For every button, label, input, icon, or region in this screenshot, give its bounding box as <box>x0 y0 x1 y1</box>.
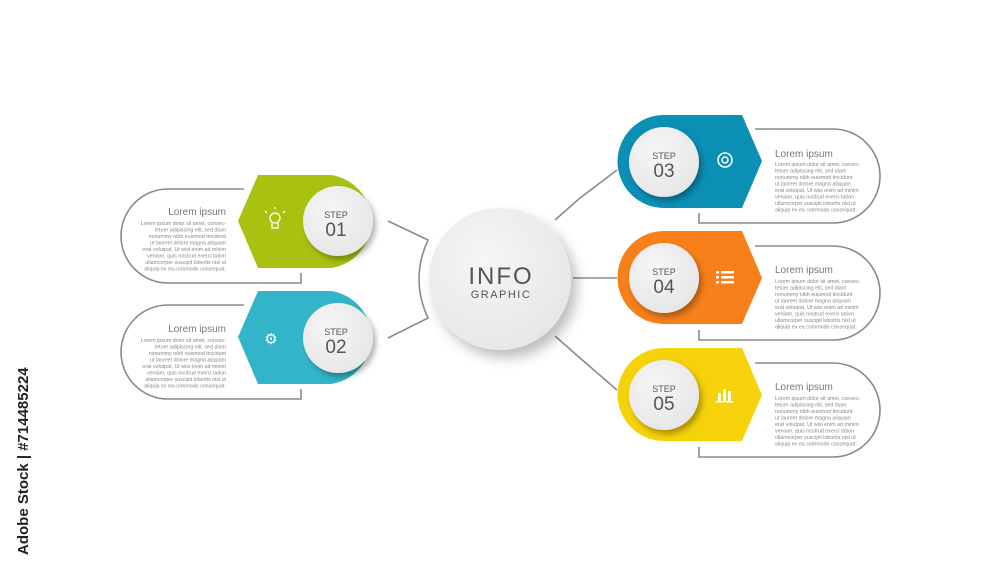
step 02: 02 <box>325 337 347 358</box>
step 04: STEP <box>652 267 676 277</box>
step 03: ut laoreet dolore magna aliquam <box>775 182 852 188</box>
step 04: 04 <box>653 277 675 298</box>
step 01: tetuer adipiscing elit, sed diam <box>155 228 227 234</box>
step 01: STEP <box>324 210 348 220</box>
step 03: ullamcorper suscipit lobortis nisl ut <box>775 201 856 207</box>
step 01: nonummy nibh euismod tincidunt <box>149 234 227 240</box>
step 03: erat volutpat. Ut wisi enim ad minim <box>775 188 859 194</box>
step 02: Lorem ipsum dolor sit amet, consec- <box>141 338 226 344</box>
step 05: nonummy nibh euismod tincidunt <box>775 409 853 415</box>
step 03: aliquip ex ea commodo consequat. <box>775 208 857 214</box>
step 03: Lorem ipsum dolor sit amet, consec- <box>775 162 861 168</box>
icon: bulb <box>265 207 285 228</box>
step 05: STEP <box>652 384 676 394</box>
step 03: STEP <box>652 151 676 161</box>
step 04: veniam, quis nostrud exerci tation <box>775 312 854 318</box>
step 02: ⚙ <box>264 331 278 348</box>
step 04: tetuer adipiscing elit, sed diam <box>775 286 847 292</box>
step 05: ut laoreet dolore magna aliquam <box>775 416 852 422</box>
step 02: Lorem ipsum <box>168 324 226 335</box>
step 02: ut laoreet dolore magna aliquam <box>150 358 227 364</box>
step 04: nonummy nibh euismod tincidunt <box>775 292 853 298</box>
step 03: tetuer adipiscing elit, sed diam <box>775 168 847 174</box>
step 02: erat volutpat. Ut wisi enim ad minim <box>142 364 227 370</box>
step 05: tetuer adipiscing elit, sed diam <box>775 402 847 408</box>
step 01: 01 <box>325 220 347 241</box>
step 02: nonummy nibh euismod tincidunt <box>149 351 227 357</box>
step 03 <box>618 115 880 223</box>
step 02: ullamcorper suscipit lobortis nisl ut <box>145 377 227 383</box>
step 05: ullamcorper suscipit lobortis nisl ut <box>775 435 856 441</box>
step 03: veniam, quis nostrud exerci tation <box>775 194 854 200</box>
step 04: Lorem ipsum dolor sit amet, consec- <box>775 279 861 285</box>
step 05: erat volutpat. Ut wisi enim ad minim <box>775 422 859 428</box>
step 05 <box>618 348 880 457</box>
center circle: INFO <box>468 263 534 290</box>
step 03: Lorem ipsum <box>775 149 833 160</box>
step 01: aliquip ex ea commodo consequat. <box>144 266 226 272</box>
step 05: veniam, quis nostrud exerci tation <box>775 428 854 434</box>
step 02 <box>121 291 373 399</box>
connectors <box>388 170 617 390</box>
step 05: Lorem ipsum dolor sit amet, consec- <box>775 396 861 402</box>
step 04: erat volutpat. Ut wisi enim ad minim <box>775 305 859 311</box>
step 01: ut laoreet dolore magna aliquam <box>150 240 227 246</box>
step 02: veniam, quis nostrud exerci tation <box>147 370 226 376</box>
center circle <box>429 208 571 350</box>
step 02: tetuer adipiscing elit, sed diam <box>155 344 227 350</box>
step 01: Lorem ipsum <box>168 207 226 218</box>
step 04: aliquip ex ea commodo consequat. <box>775 324 857 330</box>
step 04: ut laoreet dolore magna aliquam <box>775 298 852 304</box>
step 03: 03 <box>653 161 675 182</box>
step 03: nonummy nibh euismod tincidunt <box>775 175 853 181</box>
step 05: Lorem ipsum <box>775 382 833 393</box>
step 04: ullamcorper suscipit lobortis nisl ut <box>775 318 856 324</box>
step 04: Lorem ipsum <box>775 265 833 276</box>
step 02: STEP <box>324 327 348 337</box>
step 05: aliquip ex ea commodo consequat. <box>775 442 857 448</box>
step 04 <box>618 231 880 340</box>
step 01 <box>121 175 373 283</box>
stock id label: Adobe Stock | #714485224 <box>15 367 32 555</box>
step 02: aliquip ex ea commodo consequat. <box>144 384 226 390</box>
step 01: ullamcorper suscipit lobortis nisl ut <box>145 260 227 266</box>
step 01: veniam, quis nostrud exerci tation <box>147 254 226 260</box>
center circle: GRAPHIC <box>471 289 531 301</box>
step 05: 05 <box>653 394 675 415</box>
step 01: erat volutpat. Ut wisi enim ad minim <box>142 247 227 253</box>
step 01: Lorem ipsum dolor sit amet, consec- <box>141 221 226 227</box>
